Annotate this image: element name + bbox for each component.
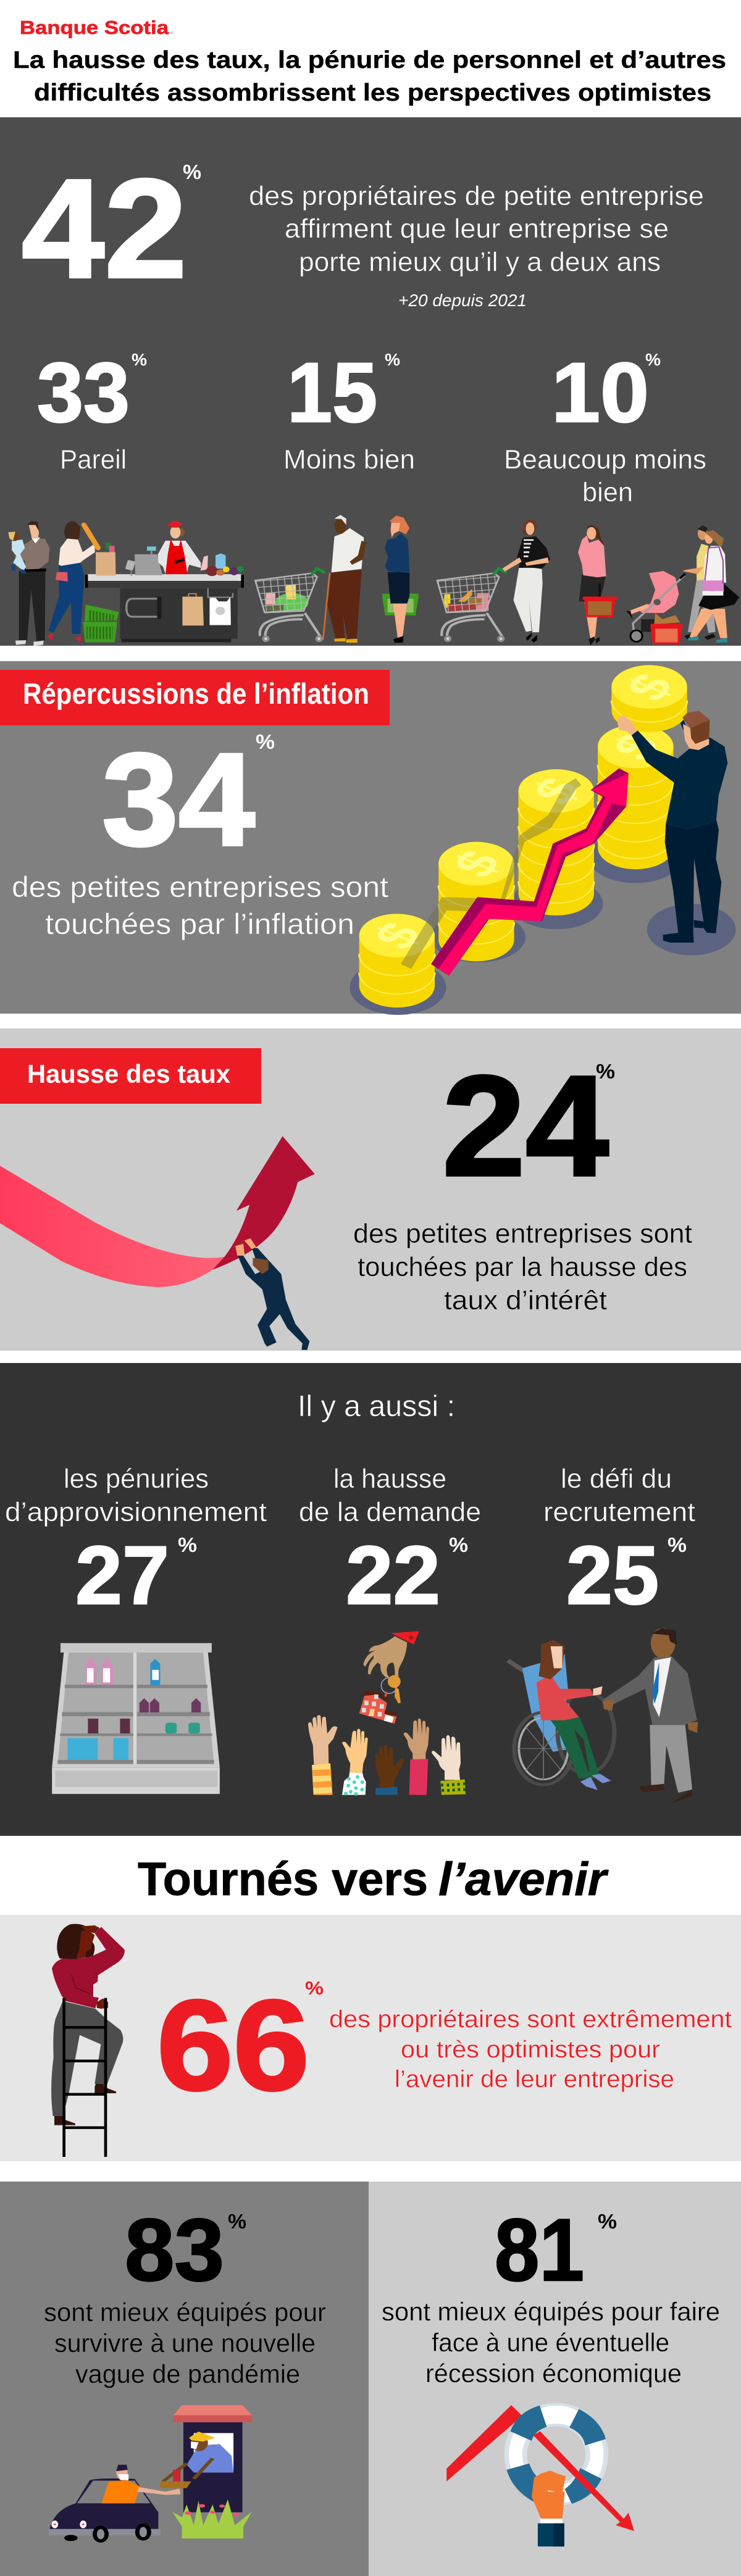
- shoes: [54, 2084, 116, 2125]
- stat: 22% demande: la hausse: [333, 1464, 446, 1494]
- coin stack 5: [611, 665, 687, 732]
- text: nouvelle vague de pandémie: [44, 2298, 326, 2388]
- text: éventuelle récession économique: face à une éventuelle: [432, 2328, 669, 2357]
- stat: 10% Beaucoup moins bien: 10: [551, 346, 649, 440]
- text: touchées par l'inflation: touchées par l’inflation: [45, 907, 354, 940]
- ladder: [64, 1998, 106, 2157]
- icon: nearly empty shelves: [52, 1643, 220, 1794]
- stat: 66%: 66: [157, 1974, 309, 2117]
- coin stack 4: $: [600, 726, 671, 767]
- illustration: queue left, cashier and customers: [8, 515, 366, 646]
- house keychain: [359, 1690, 396, 1724]
- stat: 83%: %: [228, 2210, 246, 2233]
- logo: Banque Scotia: MD: [169, 31, 174, 35]
- panel: 66% optimistes: [0, 1915, 741, 2161]
- raised hand 1: [308, 1715, 338, 1795]
- stat: 27% pénuries: d’approvisionnement: [5, 1497, 267, 1527]
- coin stack 2: [438, 842, 514, 961]
- panel: 81% récession: [369, 2182, 741, 2576]
- illustration: drive-through: [49, 2405, 252, 2543]
- cashier: [158, 521, 201, 574]
- stat: 10% Beaucoup moins bien: bien: [582, 477, 633, 507]
- stat: 33% Pareil: 33: [37, 346, 130, 440]
- stat: 25% recrutement: 25: [566, 1530, 659, 1622]
- illustration: lifebuoy and falling arrow: [446, 2403, 634, 2546]
- icon: hand giving house key to raised hands: [308, 1631, 466, 1796]
- tag: Répercussions de l'inflation: [0, 670, 390, 725]
- illustration: coin stacks and rising arrow: [350, 665, 736, 1015]
- heading: Il y a aussi: Il y a aussi :: [298, 1390, 455, 1423]
- coin stack 5: $: [614, 666, 685, 708]
- stat: 15% Moins bien: [283, 346, 415, 475]
- text: touchées par la hausse des taux: taux d’intérêt: [444, 1285, 607, 1315]
- stat: 42%: 42: [22, 151, 187, 307]
- woman in navy with basket: [382, 515, 419, 643]
- stroller: [626, 571, 685, 644]
- stat: 10% Beaucoup moins bien: Beaucoup moins: [504, 444, 706, 475]
- rising arrow: [431, 769, 629, 976]
- groceries on counter: [201, 554, 244, 576]
- stat: 34%: 34: [102, 726, 255, 873]
- arrow shadow: [401, 778, 581, 969]
- grass and flowers: [172, 2499, 252, 2538]
- text: description 42%: porte mieux qu’il y a deux ans: [299, 247, 661, 277]
- stat: 33% Pareil: [37, 346, 147, 475]
- trousers: [51, 2001, 123, 2116]
- text: touchées par l'inflation: [12, 870, 388, 940]
- shopping cart with groceries: [437, 569, 507, 642]
- face: [76, 1930, 94, 1959]
- text: touchées par l'inflation: des petites entreprises sont: [12, 870, 388, 903]
- tag: Hausse des taux: Hausse des taux: [27, 1059, 231, 1088]
- text: propriétaires optimistes: des propriétaires sont extrêmement: [329, 2006, 732, 2033]
- text: touchées par la hausse des taux: [353, 1219, 692, 1315]
- stat: 22% demande: de la demande: [299, 1497, 481, 1527]
- stat: 10% Beaucoup moins bien: %: [645, 350, 661, 369]
- arrow head: [212, 1136, 315, 1270]
- arrow front segment: [533, 2432, 634, 2531]
- stat: 15% Moins bien: Moins bien: [283, 444, 415, 475]
- cash register: [125, 546, 162, 576]
- stat: 10% Beaucoup moins bien: [504, 346, 706, 507]
- coin stack 3: $: [521, 770, 592, 812]
- stat: 25% recrutement: %: [668, 1533, 687, 1556]
- raised hand 4: [403, 1719, 429, 1795]
- heading: Tournés vers l'avenir: Tournés vers: [138, 1853, 428, 1906]
- note: +20 depuis 2021: +20 depuis 2021: [398, 291, 527, 310]
- panel: hausse des taux: [0, 1028, 741, 1351]
- man: [235, 1238, 309, 1350]
- text: nouvelle vague de pandémie: survivre à une nouvelle: [54, 2328, 316, 2357]
- text: touchées par la hausse des taux: touchées par la hausse des: [358, 1252, 687, 1282]
- tag: Hausse des taux: [0, 1048, 261, 1104]
- woman in black jacket: [503, 520, 550, 642]
- shopping cart with groceries: [255, 569, 325, 642]
- hair: [57, 1924, 94, 1959]
- stat: 42%: %: [183, 160, 201, 183]
- raised hand 5: [432, 1735, 466, 1795]
- panel: répercussions de l'inflation: [0, 661, 741, 1015]
- stat: 83%: 83: [125, 2201, 224, 2299]
- text: description 42%: [249, 181, 704, 277]
- stat: 25% recrutement: le défi du: [561, 1464, 672, 1494]
- illustration: businessman: [618, 711, 727, 943]
- green baskets: [83, 604, 119, 642]
- coin stack 2: $: [442, 843, 512, 885]
- coin stack 3: [519, 769, 594, 915]
- text: nouvelle vague de pandémie: sont mieux équipés pour: [44, 2298, 326, 2327]
- stat: 27% pénuries: %: [178, 1533, 197, 1556]
- title: La hausse des taux, la pénurie de personnel et d’autres: [13, 47, 726, 73]
- illustration: queue right, customers: [382, 515, 739, 646]
- text: propriétaires optimistes: l’avenir de leur entreprise: [395, 2066, 674, 2093]
- stat: 22% demande: 22: [346, 1530, 440, 1622]
- title: [13, 47, 726, 106]
- panel: entreprise se porte mieux: [0, 117, 741, 646]
- tag: Répercussions de l'inflation: Répercussions de l’inflation: [23, 677, 369, 710]
- panel: 83% pandémie: [0, 2182, 369, 2576]
- woman with baguette: [48, 521, 98, 643]
- old man with cane: [323, 515, 366, 643]
- title: difficultés assombrissent les perspectives optimistes: [34, 80, 711, 106]
- stat: 25% recrutement: recrutement: [543, 1497, 695, 1527]
- sweater: [52, 1927, 125, 2008]
- stat: 24%: %: [596, 1060, 615, 1083]
- text: éventuelle récession économique: récession économique: [425, 2359, 682, 2388]
- illustration: woman on ladder: [51, 1924, 125, 2157]
- shadows: [350, 831, 736, 1015]
- stat: 27% pénuries: les pénuries: [64, 1464, 209, 1494]
- coin stack 4: [598, 725, 674, 869]
- driver in car: [49, 2465, 180, 2543]
- hand holding lifebuoy: [532, 2470, 566, 2546]
- illustration: man pushing ribbon arrow: [0, 1136, 315, 1350]
- raised hand 3: [375, 1744, 404, 1795]
- icon: woman in wheelchair shaking hands with man: [508, 1628, 698, 1802]
- stat: 27% pénuries: 27: [75, 1530, 169, 1622]
- woman in pink with red basket: [578, 525, 617, 646]
- text: description 42%: affirment que leur entreprise se: [285, 214, 669, 244]
- ribbon: [0, 1166, 237, 1287]
- logo: Banque Scotia: Banque Scotia: [20, 17, 169, 38]
- text: description 42%: des propriétaires de petite entreprise: [249, 181, 704, 211]
- hands: [81, 1925, 108, 2009]
- raised hand 2: [342, 1728, 368, 1796]
- coin stack 1: [359, 914, 435, 1007]
- checkout counter: [85, 543, 244, 642]
- stat: 81%: %: [598, 2210, 617, 2233]
- stat: 81%: 81: [495, 2201, 584, 2299]
- heading: Tournés vers l'avenir: [138, 1853, 609, 1906]
- coin stack 1: $: [362, 915, 432, 957]
- booth: [160, 2405, 252, 2512]
- text: propriétaires optimistes: [329, 2006, 732, 2093]
- stat: 27% pénuries: [5, 1464, 267, 1622]
- text: éventuelle récession économique: sont mieux équipés pour faire: [382, 2297, 720, 2326]
- stat: 25% recrutement: [543, 1464, 695, 1622]
- text: nouvelle vague de pandémie: vague de pandémie: [75, 2359, 300, 2388]
- hand with keys: [363, 1631, 419, 1703]
- stat: 15% Moins bien: 15: [287, 346, 377, 440]
- lifebuoy: [504, 2403, 608, 2506]
- stat: 34%: %: [256, 730, 275, 753]
- heading: Tournés vers l'avenir: l’avenir: [438, 1853, 609, 1906]
- stat: 15% Moins bien: %: [385, 350, 400, 369]
- text: propriétaires optimistes: ou très optimistes pour: [401, 2036, 660, 2063]
- couple: [682, 525, 739, 643]
- stat: 24%: 24: [442, 1046, 609, 1206]
- panel: il y a aussi: [0, 1363, 741, 1836]
- arrow back segment: [446, 2405, 522, 2482]
- stat: 33% Pareil: Pareil: [60, 444, 127, 475]
- text: éventuelle récession économique: [382, 2297, 720, 2388]
- stat: 22% demande: [299, 1464, 481, 1622]
- stat: 66%: %: [305, 1977, 324, 1999]
- stat: 22% demande: %: [449, 1533, 468, 1556]
- man with baby: [8, 521, 49, 646]
- text: touchées par la hausse des taux: des petites entreprises sont: [353, 1219, 692, 1249]
- stat: 33% Pareil: %: [132, 350, 147, 369]
